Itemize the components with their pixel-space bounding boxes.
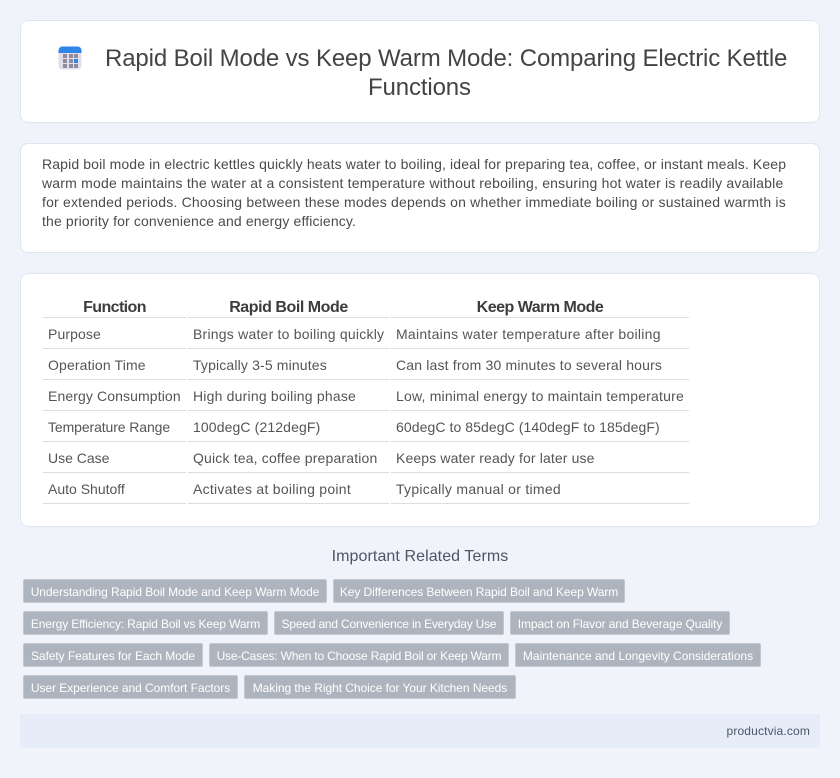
row: purpose (48, 326, 661, 342)
row: auto shutoff (48, 481, 561, 497)
summary text: for extended periods. Choosing between these modes depends on whether immediate boiling or sustained warmth is (42, 194, 786, 210)
row: temperature range (48, 419, 660, 435)
row: auto shutoff: Auto Shutoff (48, 481, 125, 497)
row: auto shutoff: Typically manual or timed (396, 481, 561, 497)
footer: source: productvia.com (727, 724, 810, 738)
row: operation time (48, 357, 662, 373)
title (105, 45, 787, 101)
panel: summary (20, 143, 820, 253)
footer bar (20, 714, 820, 748)
table header (83, 299, 604, 316)
summary text: Rapid boil mode in electric kettles quickly heats water to boiling, ideal for preparing tea, coffee, or instant meals. Keep (42, 156, 786, 172)
summary text (42, 156, 786, 229)
row: temperature range: 100degC (212degF) (193, 419, 320, 435)
row: operation time: Operation Time (48, 357, 146, 373)
row: energy consumption: Energy Consumption (48, 388, 181, 404)
related term tags: Making the Right Choice for Your Kitchen Needs (253, 681, 507, 695)
related term tags: Impact on Flavor and Beverage Quality (518, 617, 722, 631)
related term tags: Use-Cases: When to Choose Rapid Boil or Keep Warm (217, 649, 501, 663)
comparison table (43, 299, 689, 504)
row: use case (48, 450, 595, 466)
table header: Keep Warm Mode (477, 299, 603, 316)
row: auto shutoff: Activates at boiling point (193, 481, 351, 497)
table header: Rapid Boil Mode (229, 299, 348, 316)
heading: related terms: Important Related Terms (332, 548, 508, 565)
row: energy consumption: High during boiling phase (193, 388, 356, 404)
title: Rapid Boil Mode vs Keep Warm Mode: Comparing Electric Kettle (105, 45, 787, 72)
summary text: the priority for convenience and energy efficiency. (42, 213, 356, 229)
icon: calendar (58, 46, 82, 70)
related term tags: Key Differences Between Rapid Boil and Keep Warm (340, 585, 618, 599)
row: purpose: Brings water to boiling quickly (193, 326, 384, 342)
related term tags: Energy Efficiency: Rapid Boil vs Keep Warm (31, 617, 260, 631)
panel: comparison table (20, 273, 820, 527)
row: operation time: Can last from 30 minutes to several hours (396, 357, 662, 373)
title: Functions (368, 74, 471, 101)
row: purpose: Purpose (48, 326, 101, 342)
row: purpose: Maintains water temperature after boiling (396, 326, 661, 342)
related term tags: User Experience and Comfort Factors (31, 681, 230, 695)
related term tags: Safety Features for Each Mode (31, 649, 195, 663)
summary text: warm mode maintains the water at a consistent temperature without reboiling, ensuring hot water is readily available (42, 175, 783, 191)
related term tags: Maintenance and Longevity Considerations (523, 649, 753, 663)
row: energy consumption: Low, minimal energy to maintain temperature (396, 388, 684, 404)
related term tags: Understanding Rapid Boil Mode and Keep Warm Mode (31, 585, 319, 599)
row: temperature range: 60degC to 85degC (140degF to 185degF) (396, 419, 660, 435)
related term tags (23, 579, 761, 699)
row: use case: Quick tea, coffee preparation (193, 450, 377, 466)
row: use case: Keeps water ready for later use (396, 450, 595, 466)
row: use case: Use Case (48, 450, 109, 466)
row: temperature range: Temperature Range (48, 419, 170, 435)
table header: Function (83, 299, 146, 316)
panel: header (20, 20, 820, 123)
related term tags: Speed and Convenience in Everyday Use (282, 617, 496, 631)
row: energy consumption (48, 388, 684, 404)
row: operation time: Typically 3-5 minutes (193, 357, 327, 373)
